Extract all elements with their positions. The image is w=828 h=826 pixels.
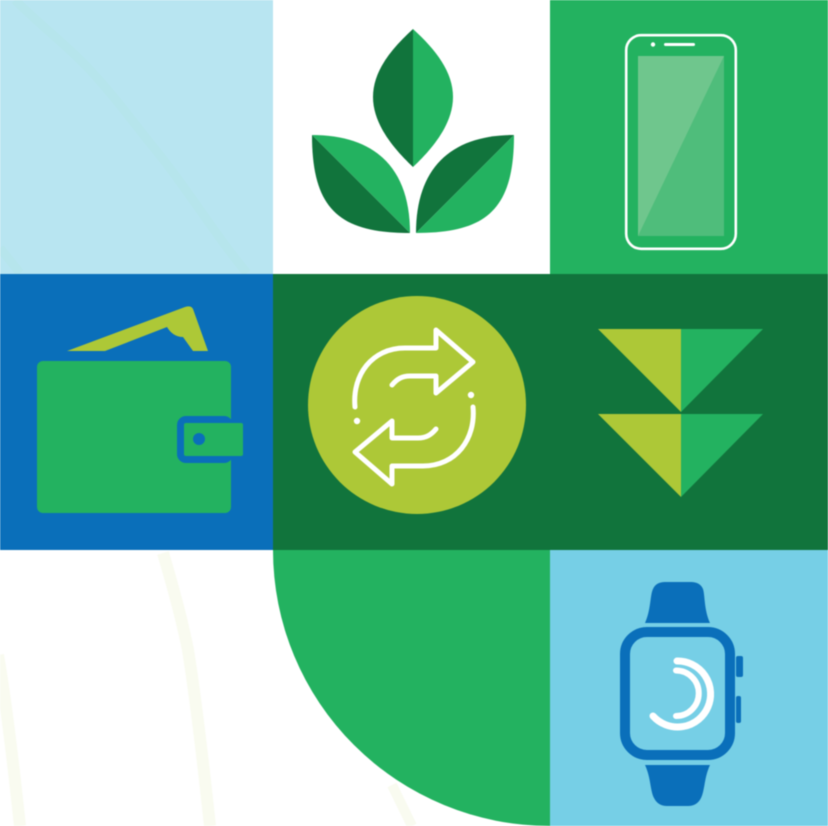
panel: sky blue tile with watch icon — [550, 550, 828, 826]
icon: plant leaves — [312, 29, 514, 233]
icon: wallet — [37, 306, 243, 513]
icon: smartwatch — [625, 582, 743, 806]
panel: white tile with plant icon — [273, 0, 550, 274]
panel: dark green band — [273, 274, 828, 550]
panel: blue tile with wallet icon — [0, 274, 273, 550]
icon: stacked down triangles — [598, 329, 763, 497]
shape: green quarter circle — [273, 550, 550, 826]
icon: smartphone — [626, 35, 736, 249]
panel: white tile with faint streaks — [0, 550, 412, 826]
icon: circular refresh arrows — [308, 296, 526, 514]
panel: light blue tile — [0, 0, 273, 274]
panel: green tile with phone icon — [550, 0, 828, 274]
